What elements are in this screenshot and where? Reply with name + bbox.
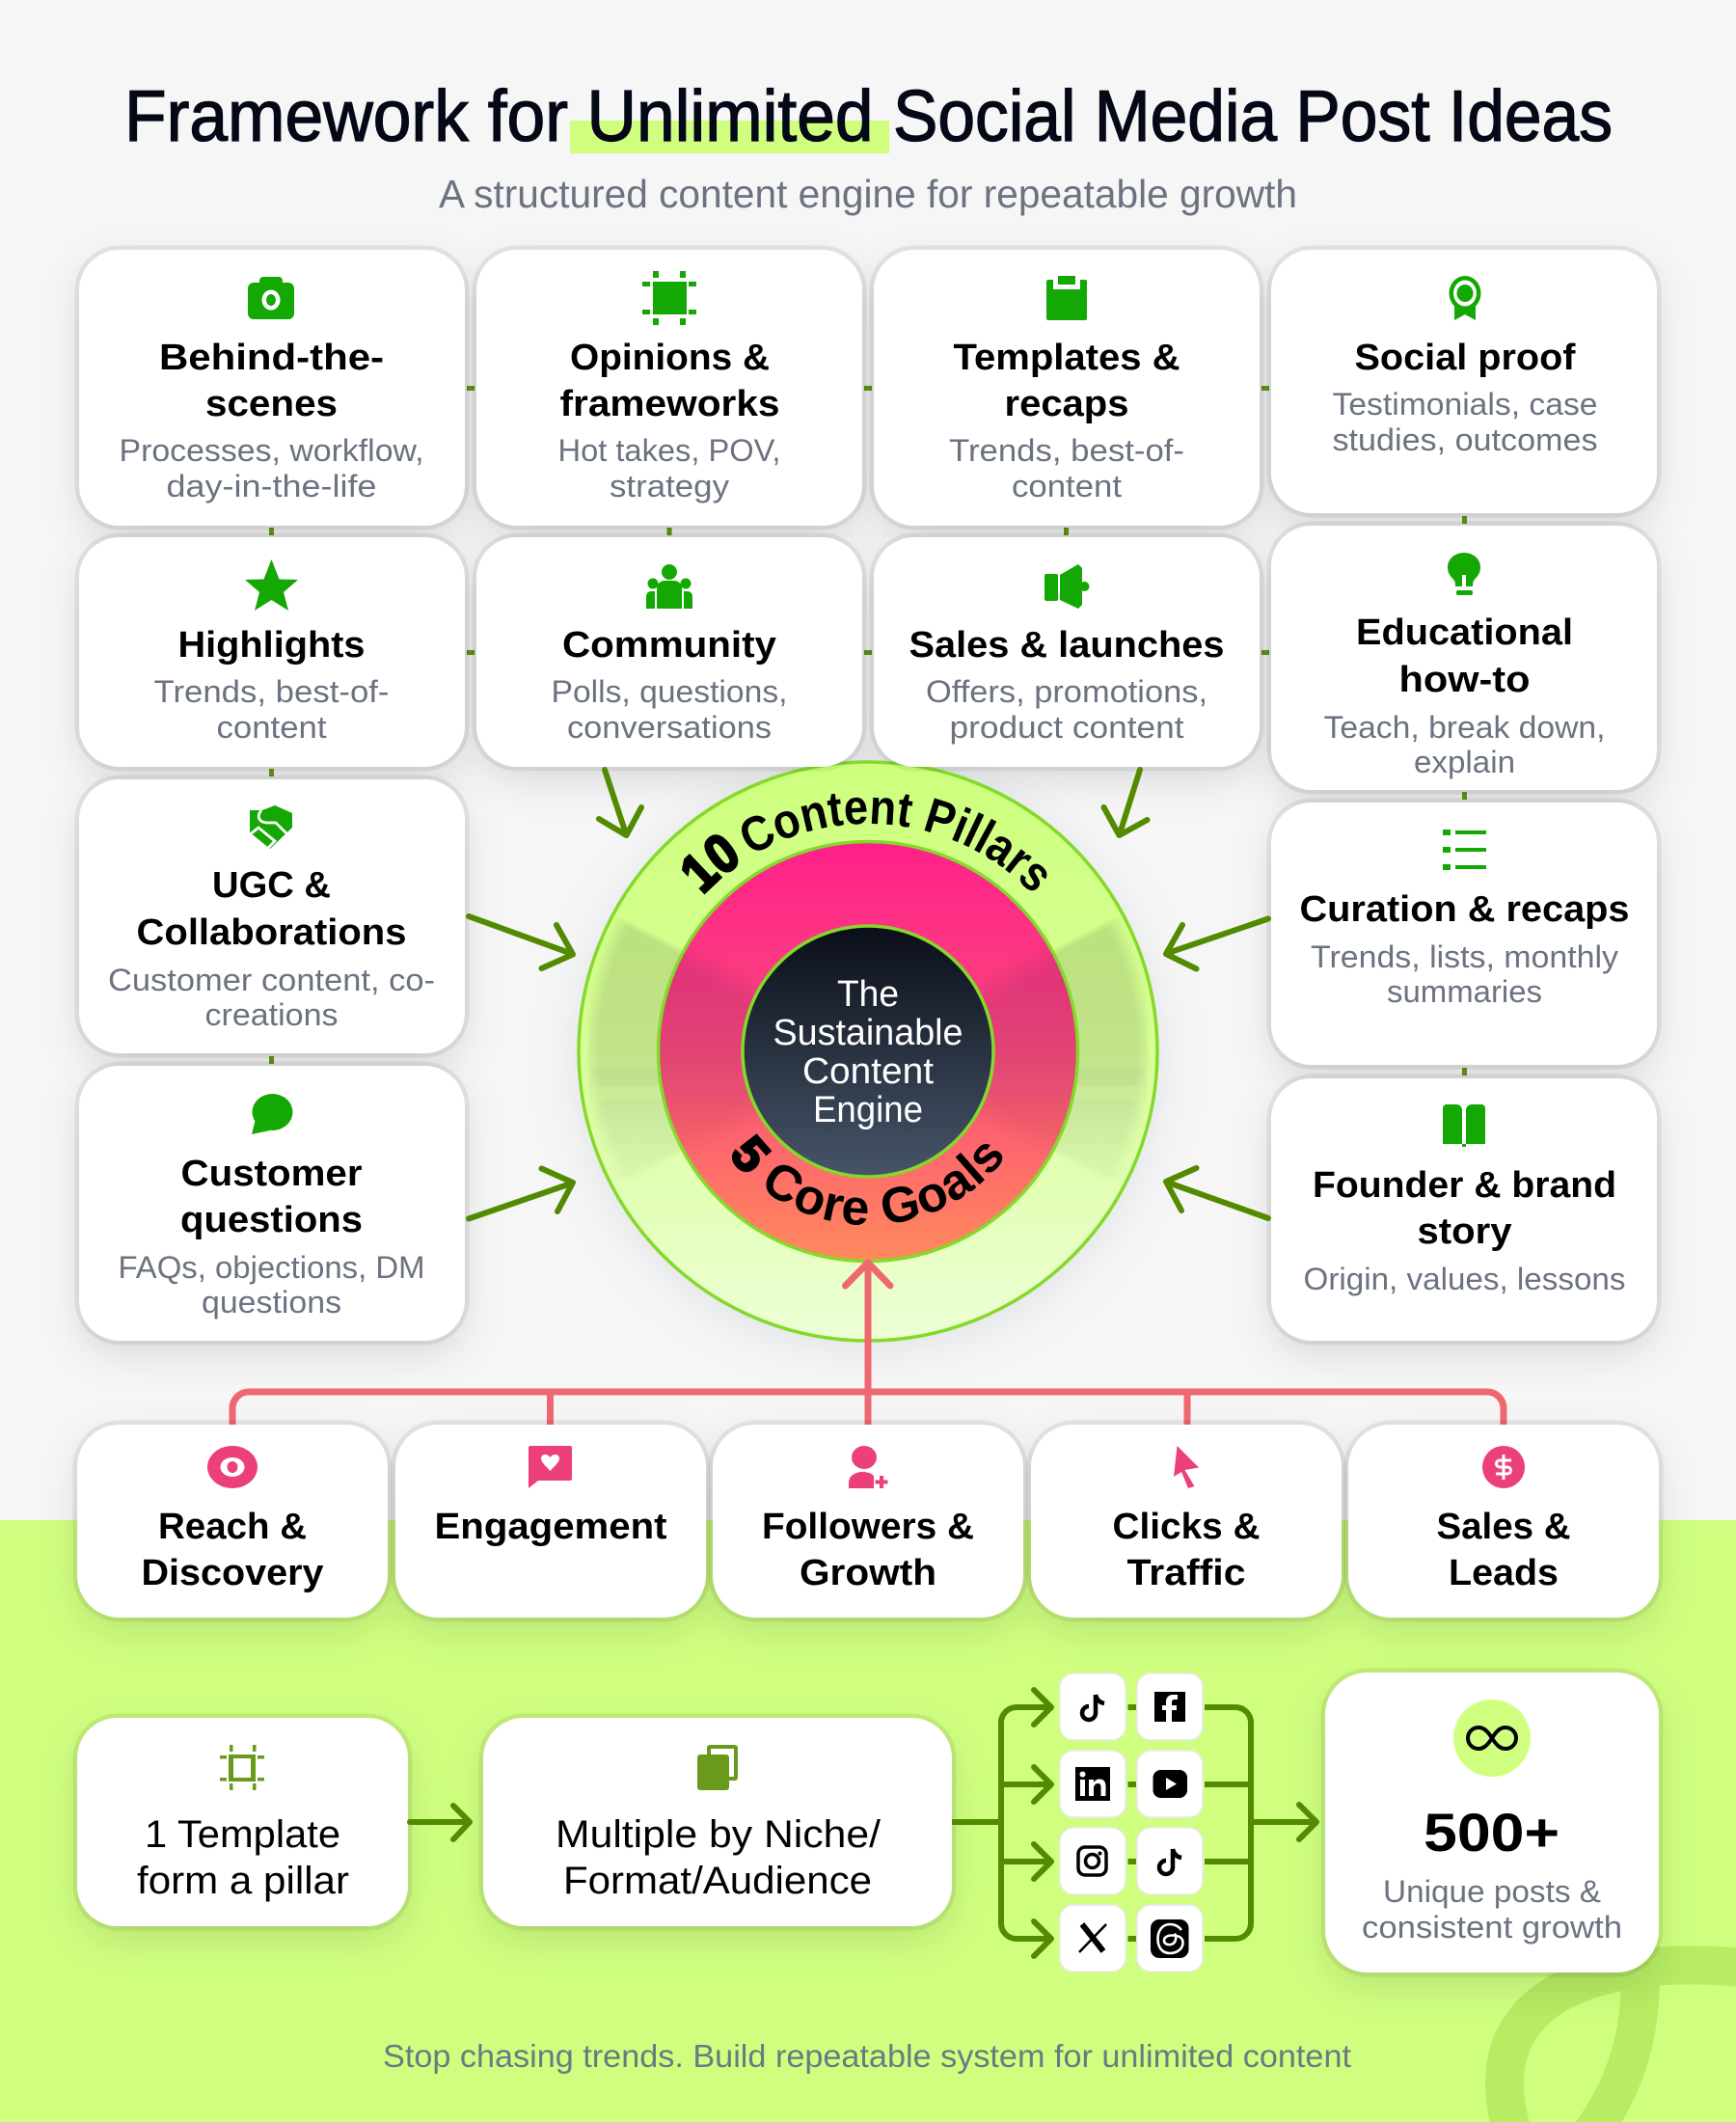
icon: bulb [1448, 553, 1480, 595]
panel: 1 Template: 1 Template [145, 1813, 340, 1856]
pink ring soft shading [660, 949, 1076, 1144]
arrow: platform splitter [952, 1690, 1316, 1956]
panel: Opinions & frameworks: strategy [610, 469, 729, 503]
panel: Reach & Discovery: Reach & [158, 1507, 307, 1547]
panel: Engagement [395, 1425, 706, 1618]
panel: Behind-the-scenes: day-in-the-life [166, 469, 376, 503]
green bottom band [0, 1520, 1736, 2122]
panel: UGC & Collaborations [79, 779, 465, 1053]
panel: Reach & Discovery [77, 1425, 388, 1618]
panel: 1 Template [77, 1718, 408, 1926]
icon: megaphone [1044, 564, 1090, 609]
panel: 500+ result: consistent growth [1362, 1910, 1622, 1945]
icon: instagram [1078, 1847, 1106, 1875]
panel: Sales & Leads: Sales & [1437, 1507, 1570, 1547]
panel: Community: conversations [567, 710, 772, 745]
central engine diagram [571, 760, 1165, 1356]
panel: Customer questions: FAQs, objections, DM [118, 1250, 424, 1285]
icon: heart message [529, 1446, 572, 1488]
panel: Curation & recaps: Trends, lists, monthly [1311, 939, 1618, 974]
icon: youtube [1153, 1770, 1187, 1798]
label: 10 Content Pillars: 10 Content Pillars [682, 793, 1047, 895]
footer tagline: Stop chasing trends. Build repeatable system for unlimited content [383, 2038, 1351, 2074]
inner core: Engine [813, 1090, 923, 1130]
panel: Clicks & Traffic: Traffic [1126, 1553, 1246, 1593]
page background [0, 0, 1736, 1520]
panel: Behind-the-scenes: Processes, workflow, [120, 433, 424, 468]
icon: chip [642, 271, 696, 325]
panel: Founder & brand story [1271, 1078, 1657, 1341]
panel: 500+ result: Unique posts & [1383, 1874, 1601, 1909]
label: 5 Core Goals: 5 Core Goals [731, 1133, 1003, 1225]
panel: Multiple by Niche: Format/Audience [563, 1860, 872, 1902]
panel: Behind-the-scenes: Behind-the- [159, 338, 384, 378]
icon: threads [1151, 1919, 1188, 1958]
panel: Customer questions: Customer [181, 1154, 363, 1194]
panel: Educational how-to [1271, 526, 1657, 790]
panel: Opinions & frameworks: Opinions & [570, 338, 770, 378]
panel: 500+ result: 500+ [1424, 1802, 1560, 1863]
panel: Customer questions [79, 1066, 465, 1341]
social platform tiles [1060, 1673, 1203, 1972]
icon: camera [248, 277, 294, 319]
panel: Sales & launches [874, 537, 1260, 767]
panel: 1 Template: form a pillar [137, 1860, 349, 1902]
icon: tiktok [1082, 1695, 1104, 1720]
panel: Social proof: Testimonials, case [1333, 387, 1597, 422]
panel: Sales & launches: Offers, promotions, [926, 674, 1207, 709]
icon: list [1443, 830, 1486, 870]
panel: Educational how-to: how-to [1398, 660, 1530, 700]
panel: Opinions & frameworks [476, 250, 862, 526]
ring shadow wedges [588, 920, 1148, 1167]
panel: Curation & recaps: summaries [1387, 974, 1542, 1009]
panel: UGC & Collaborations: UGC & [212, 865, 331, 906]
subtitle: A structured content engine for repeatable growth [439, 172, 1297, 216]
panel: Customer questions: questions [180, 1200, 363, 1240]
panel: Behind-the-scenes: scenes [205, 384, 338, 424]
panel: Community: Polls, questions, [552, 674, 787, 709]
panel: Educational how-to: Educational [1356, 612, 1573, 653]
panel: Highlights: Highlights [177, 625, 365, 666]
icon: linkedin [1075, 1767, 1110, 1801]
panel: Opinions & frameworks: frameworks [559, 384, 779, 424]
icon: star [245, 559, 298, 611]
panel: Multiple by Niche: Multiple by Niche/ [556, 1813, 882, 1856]
panel: Templates & recaps [874, 250, 1260, 526]
panel: Social proof: Social proof [1354, 338, 1576, 378]
panel: Customer questions: questions [202, 1285, 341, 1319]
panel: Behind-the-scenes [79, 250, 465, 526]
panel: Sales & Leads [1348, 1425, 1659, 1618]
connector stubs between pillar cards [269, 386, 1467, 1075]
panel: Opinions & frameworks: Hot takes, POV, [557, 433, 781, 468]
icon: book [1443, 1104, 1485, 1147]
icon: x [1079, 1924, 1106, 1952]
panel: Followers & Growth [713, 1425, 1023, 1618]
panel: Founder & brand story: Founder & brand [1313, 1165, 1616, 1206]
icon: dollar [1482, 1446, 1525, 1488]
panel: Highlights: content [216, 710, 327, 745]
panel: Clicks & Traffic: Clicks & [1113, 1507, 1260, 1547]
decorative loop [1505, 1965, 1736, 2122]
panel: Multiple by Niche [483, 1718, 952, 1926]
panel: 500+ result [1325, 1673, 1659, 1972]
panel: Curation & recaps [1271, 803, 1657, 1065]
panel: Community: Community [562, 625, 776, 666]
panel: Founder & brand story: story [1418, 1211, 1512, 1252]
panel: Followers & Growth: Growth [800, 1553, 936, 1593]
card shadows [77, 250, 1659, 1972]
inner core [743, 926, 993, 1177]
title: Social Media Post Ideas [893, 75, 1613, 156]
icon: speech bubble [252, 1094, 293, 1134]
icon: cursor [1174, 1446, 1199, 1488]
panel: UGC & Collaborations: Collaborations [137, 912, 407, 953]
panel: Sales & launches: Sales & launches [909, 625, 1225, 666]
icon: handshake [249, 805, 292, 849]
arrow: goals into engine [232, 1263, 1504, 1425]
panel: Community [476, 537, 862, 767]
icon: ribbon [1449, 276, 1481, 320]
inner core: The [837, 974, 899, 1015]
inner core: Sustainable [773, 1013, 963, 1053]
icon: template frame [220, 1745, 264, 1790]
icon: clipboard [1046, 276, 1087, 320]
icon: target [207, 1446, 258, 1488]
panel: Templates & recaps: Templates & [953, 338, 1180, 378]
title [124, 75, 1613, 156]
panel: Founder & brand story: Origin, values, lessons [1304, 1262, 1626, 1296]
inner core: Content [802, 1051, 934, 1092]
title: Framework for [124, 75, 568, 156]
panel: Social proof: studies, outcomes [1333, 422, 1597, 457]
panel: Clicks & Traffic [1031, 1425, 1342, 1618]
panel: Sales & Leads: Leads [1449, 1553, 1559, 1593]
icon: copies [697, 1745, 738, 1790]
title: Unlimited [586, 75, 874, 156]
panel: Followers & Growth: Followers & [762, 1507, 974, 1547]
panel: UGC & Collaborations: Customer content, co- [108, 963, 435, 997]
panel: Curation & recaps: Curation & recaps [1300, 889, 1630, 930]
panel: Templates & recaps: content [1012, 469, 1122, 503]
middle ring: 5 core goals [658, 841, 1078, 1262]
panel: Templates & recaps: recaps [1005, 384, 1128, 424]
panel: Social proof [1271, 250, 1657, 513]
arrow: pillars into engine [469, 770, 1268, 1219]
panel: Highlights: Trends, best-of- [154, 674, 390, 709]
panel: Templates & recaps: Trends, best-of- [949, 433, 1184, 468]
panel: Sales & launches: product content [949, 710, 1184, 745]
panel: UGC & Collaborations: creations [204, 997, 338, 1032]
panel: Engagement: Engagement [434, 1507, 667, 1547]
panel: Educational how-to: Teach, break down, [1323, 710, 1605, 745]
arrow: template to multiply [410, 1806, 470, 1839]
icon: tiktok [1159, 1849, 1181, 1874]
icon: people [646, 564, 692, 609]
panel: Highlights [79, 537, 465, 767]
panel: Educational how-to: explain [1414, 745, 1515, 779]
panel: Reach & Discovery: Discovery [141, 1553, 324, 1593]
icon: add person [849, 1446, 887, 1488]
icon: infinity [1453, 1700, 1531, 1777]
icon: facebook [1154, 1692, 1185, 1722]
outer ring: 10 content pillars [579, 762, 1157, 1341]
